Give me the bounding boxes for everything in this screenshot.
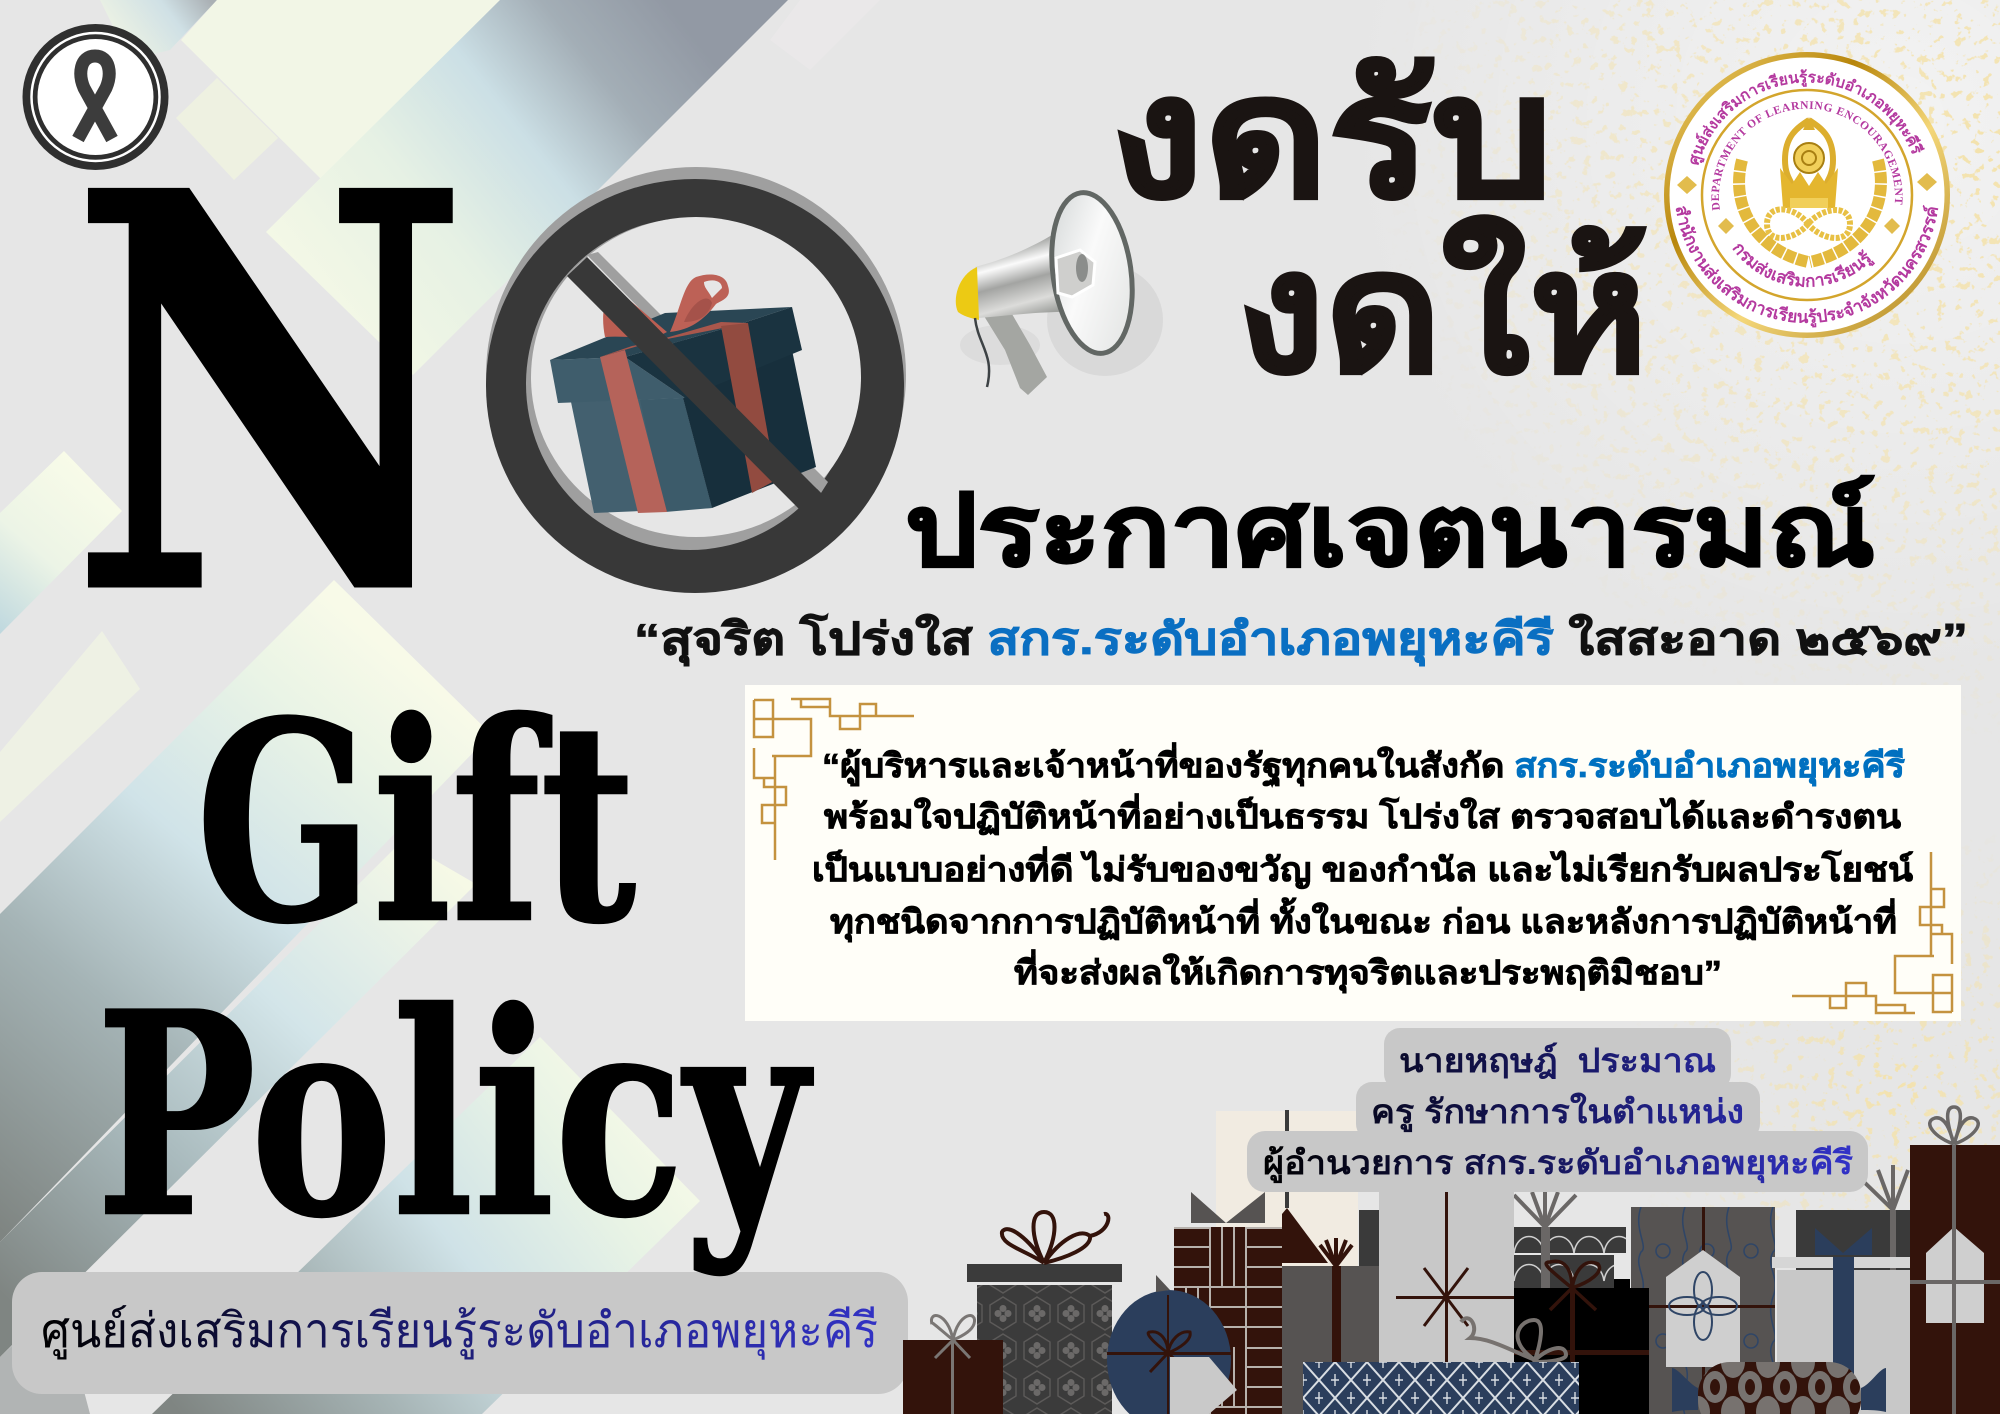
gift box [550,274,816,513]
dark gift behind blue ribbon [1796,1165,1910,1270]
gray gift with brown ribbon [1282,1238,1396,1414]
blue lattice gift [1303,1362,1579,1414]
brick pattern gift [1174,1192,1328,1414]
pledge text: ทุกชนิดจากการปฏิบัติหน้าที่ ทั้งในขณะ ก่อน และหลังการปฏิบัติหน้าที่ [830,897,1897,943]
megaphone driver [1056,250,1095,297]
pledge text: พร้อมใจปฏิบัติหน้าที่อย่างเป็นธรรม โปร่งใส ตรวจสอบได้และดำรงตน [824,793,1901,835]
pledge text: เป็นแบบอย่างที่ดี ไม่รับของขวัญ ของกำนัล และไม่เรียกรับผลประโยชน์ [812,846,1913,889]
slash [567,257,821,512]
signer role: ครู รักษาการในตำแหน่ง [1371,1092,1744,1133]
seal emblem [1677,117,1937,262]
white gift with blue ribbon [1772,1228,1915,1414]
patterned gray gift [1631,1207,1775,1414]
organization pill [12,1272,908,1394]
heading letter N: N [70,76,469,715]
megaphone shadow [960,264,1163,376]
gift boxes illustration [903,1107,2000,1414]
megaphone icon [956,187,1163,395]
gray ring shadow [486,167,906,583]
hexagon pattern gift [967,1212,1122,1414]
inner hole [526,217,861,550]
panel: pledge statement [745,685,1961,1021]
megaphone flare [1042,187,1142,359]
tall dark gift with scallops [1514,1190,1626,1289]
cream backdrop box [1216,1110,1358,1266]
seal logo [1664,52,1950,338]
slogan: “สุจริต โปร่งใส สกร.ระดับอำเภอพยุหะคีรี ใสสะอาด ๒๕๖๙” [634,612,1968,667]
signer name: นายหฤษฎ์ ประมาณ [1399,1042,1716,1079]
seal text: สำนักงานส่งเสริมการเรียนรู้ประจำจังหวัดนครสวรรค์ [1676,204,1938,328]
black gift [1514,1261,1649,1414]
ribbon badge icon [22,24,168,170]
pledge text [812,742,1913,994]
candy gift [1672,1362,1886,1414]
pledge text: ที่จะส่งผลให้เกิดการทุจริตและประพฤติมิชอบ” [1014,949,1722,994]
light gift with star ribbon [1379,1192,1514,1362]
far right brown gift [1910,1107,2000,1414]
gold corner ornament bottom right [1792,852,1952,1013]
plate background [1247,1028,1868,1192]
gray bow on top of front gift [1461,1318,1566,1362]
dark ring [486,179,904,593]
signature plate [1247,1028,1868,1192]
signer position: ผู้อำนวยการ สกร.ระดับอำเภอพยุหะคีรี [1263,1144,1853,1184]
organization pill: ศูนย์ส่งเสริมการเรียนรู้ระดับอำเภอพยุหะคีรี [41,1305,878,1360]
seal text: DEPARTMENT OF LEARNING ENCOURAGEMENT [1711,101,1903,211]
heading Policy: Policy [96,951,814,1279]
heading no receiving: งดรับ [1110,43,1553,233]
seal text: ศูนย์ส่งเสริมการเรียนรู้ระดับอำเภอพยุหะคีรี [1690,69,1925,166]
heading no giving: งดให้ [1237,215,1648,408]
pledge text: “ผู้บริหารและเจ้าหน้าที่ของรัฐทุกคนในสังกัด สกร.ระดับอำเภอพยุหะคีรี [822,742,1905,787]
dark brown gift far left [903,1316,1003,1414]
gold corner ornament top left [754,699,914,860]
megaphone handle [984,314,1047,395]
prohibition sign with gift box [486,167,906,593]
seal text [1676,69,1938,328]
heading Gift: Gift [196,662,637,984]
seal text: กรมส่งเสริมการเรียนรู้ [1732,244,1875,288]
slash highlight [587,252,828,493]
blue round gift [1107,1275,1237,1414]
megaphone cap [956,267,979,320]
megaphone cone [975,235,1062,318]
megaphone cord [975,318,989,387]
small gray box [1359,1210,1379,1266]
heading declaration of intent: ประกาศเจตนารมณ์ [905,475,1875,587]
